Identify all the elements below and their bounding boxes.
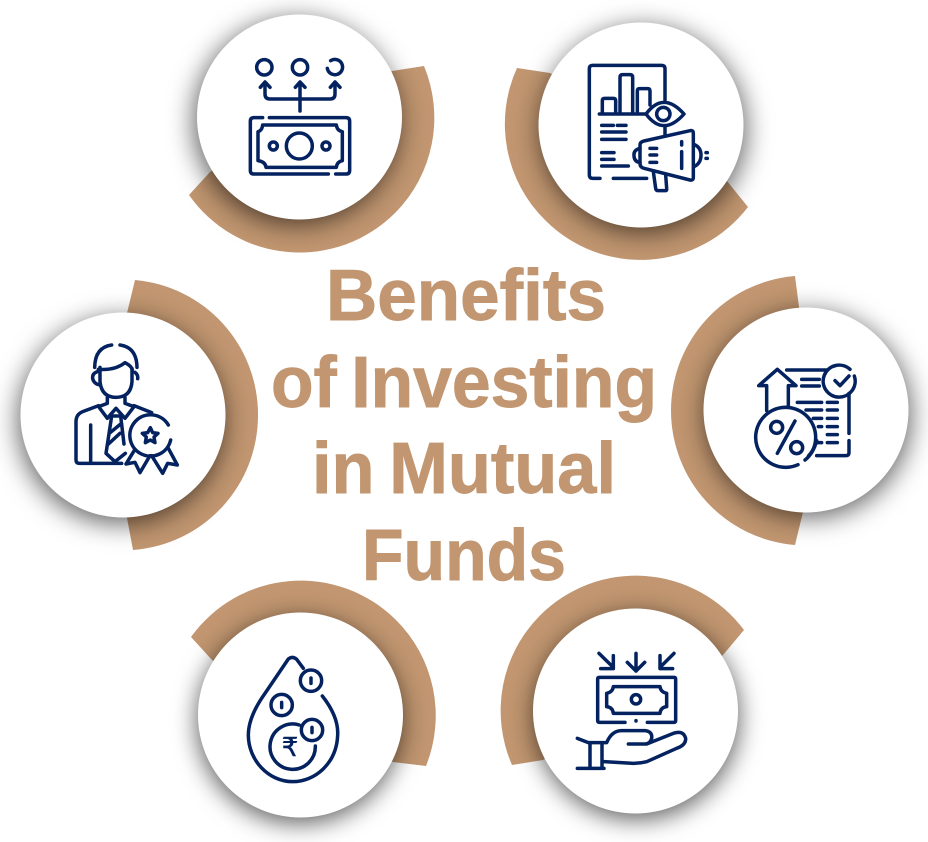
circle: bottom right — [533, 608, 738, 814]
icon: professional with award medal — [76, 345, 177, 473]
circle: bottom left — [198, 612, 403, 818]
circle: right — [704, 308, 908, 512]
title — [271, 256, 657, 596]
title: in Mutual — [312, 429, 616, 509]
icon: report with eye and megaphone — [589, 65, 707, 191]
arc: right — [671, 276, 806, 545]
arc: left — [123, 280, 258, 550]
circle: left — [20, 312, 226, 518]
circle: top right — [538, 22, 744, 228]
icon: money received in hand — [577, 653, 686, 768]
icon: liquidity drop with coins — [248, 657, 338, 782]
icon: rupee symbol: ₹ — [282, 733, 298, 763]
icon: money diversifying into coins — [250, 59, 350, 174]
arc: bottom right — [501, 576, 744, 765]
arc: top left — [189, 66, 434, 253]
title: Benefits — [326, 256, 606, 336]
title: of Investing — [271, 343, 657, 423]
arc: bottom left — [191, 581, 436, 766]
icon: percentage return with document — [756, 365, 855, 467]
circle: top left — [197, 14, 402, 220]
arc: top right — [505, 68, 748, 260]
title: Funds — [362, 516, 566, 596]
